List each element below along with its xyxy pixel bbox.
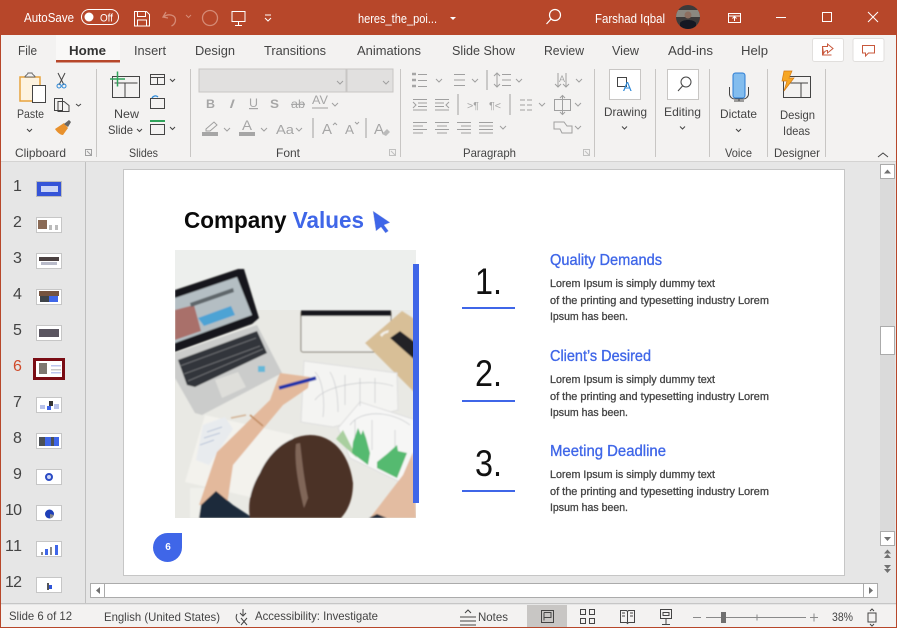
user name: Farshad Iqbal: [595, 11, 665, 26]
design ideas button: [774, 71, 820, 160]
paragraph group: Paragraph: [463, 146, 516, 160]
slide numbers: 2: [13, 214, 22, 231]
item 3: 3.: [475, 443, 502, 484]
font group: AV: [312, 93, 328, 107]
notes button: Notes: [478, 610, 508, 624]
font group: A: [242, 117, 253, 133]
clipboard group: [15, 73, 92, 160]
tablet: [301, 310, 391, 352]
item 3: Ipsum has been.: [550, 502, 628, 514]
item 1: Lorem Ipsum is simply dummy text: [550, 278, 715, 290]
status bar: [0, 603, 897, 627]
zoom slider: 38%: [832, 610, 853, 624]
photo: desk with laptop: [175, 250, 416, 518]
item 2: of the printing and typesetting industry Lorem: [550, 391, 769, 403]
slide numbers: [5, 178, 22, 591]
slide numbers: 10: [5, 502, 22, 519]
ribbon tabs: Insert: [134, 43, 166, 58]
font group: A: [345, 122, 354, 137]
ribbon tabs: Slide Show: [452, 43, 516, 58]
search icon: [546, 10, 560, 24]
font group: [199, 69, 396, 160]
slide numbers: 1: [13, 178, 22, 195]
thumbnail 2: [36, 218, 62, 232]
accessibility status: Accessibility: Investigate: [255, 609, 378, 623]
user avatar: [676, 5, 700, 29]
clipboard group: Clipboard: [15, 146, 66, 160]
item 1: [462, 252, 769, 323]
autosave toggle: Off: [100, 12, 114, 24]
quick access icons: [134, 10, 271, 26]
window controls: [728, 12, 878, 22]
ribbon tabs: Transitions: [264, 43, 326, 58]
notebook: [185, 415, 293, 518]
editing button: Editing: [664, 105, 701, 119]
dictate button: Voice: [725, 146, 752, 160]
slides group: [108, 72, 175, 160]
design ideas button: Ideas: [783, 124, 810, 138]
thumbnail 9: [36, 470, 62, 484]
paragraph group: ¶<: [489, 101, 501, 112]
item 2: [462, 348, 769, 419]
paragraph group: >¶: [467, 101, 479, 112]
status bar: Slide 6 of 12: [9, 609, 72, 623]
zoom slider: [693, 609, 876, 626]
accent bar: [413, 264, 419, 503]
view buttons: [527, 605, 672, 627]
ribbon tabs: Add-ins: [668, 43, 714, 58]
arm and pen: [199, 373, 416, 518]
autosave toggle: AutoSave: [24, 10, 74, 25]
ribbon: [0, 35, 897, 162]
slides group: New: [114, 107, 139, 121]
drawing button: Drawing: [604, 105, 647, 119]
ribbon tabs: Help: [741, 43, 768, 58]
page number badge: [153, 533, 182, 562]
clipboard group: Paste: [17, 107, 44, 121]
slides group: Slides: [129, 146, 158, 160]
page number badge: 6: [165, 542, 171, 553]
horizontal scrollbar: [90, 584, 878, 598]
font group: B: [206, 97, 215, 111]
slide thumbnail panel: [5, 162, 86, 603]
item 3: Meeting Deadline: [550, 443, 666, 460]
dictate button: Dictate: [720, 107, 757, 121]
font group: ab: [291, 97, 305, 111]
thumbnail 10: [36, 506, 62, 520]
laptop: [175, 269, 282, 415]
font group: A: [374, 121, 384, 138]
slides group: Slide: [108, 123, 133, 137]
ribbon tabs: Design: [195, 43, 235, 58]
sketches: [301, 361, 416, 482]
vertical scrollbar: [880, 164, 895, 573]
design ideas button: Design: [780, 108, 815, 122]
item 2: Lorem Ipsum is simply dummy text: [550, 374, 715, 386]
slide numbers: 9: [13, 466, 22, 483]
slide canvas: [124, 170, 844, 576]
item 1: Ipsum has been.: [550, 311, 628, 323]
ribbon tabs: Review: [544, 43, 585, 58]
hair and shirt: [199, 435, 353, 518]
status bar: English (United States): [104, 610, 220, 624]
slide numbers: 5: [13, 322, 22, 339]
thumbnail 5: [36, 326, 62, 340]
font group: U: [249, 96, 258, 110]
thumbnail 8: [36, 434, 62, 448]
font group: A: [322, 121, 332, 138]
slide numbers: 11: [5, 538, 22, 555]
ribbon tabs: View: [612, 43, 640, 58]
item 1: of the printing and typesetting industry Lorem: [550, 295, 769, 307]
font group: Aa: [276, 122, 295, 137]
file name: heres_the_poi...: [358, 11, 437, 26]
collapse ribbon arrow: [878, 153, 888, 157]
thumbnail 1: [36, 182, 62, 196]
item 3: [462, 443, 769, 514]
font group: Font: [276, 146, 301, 160]
thumbnail 6 selected: [34, 360, 64, 378]
ribbon tabs: [18, 35, 768, 62]
thumbnail 3: [36, 254, 62, 268]
slide numbers: 4: [13, 286, 22, 303]
drawing button: [604, 70, 647, 129]
wooden board: [365, 311, 416, 394]
item 3: of the printing and typesetting industry Lorem: [550, 486, 769, 498]
design ideas button: Designer: [774, 146, 820, 160]
item 2: Client’s Desired: [550, 348, 651, 365]
item 1: Quality Demands: [550, 252, 662, 269]
item 1: 1.: [475, 261, 502, 302]
autosave toggle: [24, 10, 118, 25]
editing button: [664, 70, 701, 129]
share and comment buttons: [812, 38, 884, 62]
drawing button: A: [623, 79, 632, 94]
icon: cursor arrow: [373, 211, 390, 233]
dictate button: [720, 73, 757, 160]
item 2: Ipsum has been.: [550, 407, 628, 419]
title bar: [0, 0, 897, 35]
item 3: Lorem Ipsum is simply dummy text: [550, 469, 715, 481]
slide numbers: 12: [5, 574, 22, 591]
thumbnail 11: [36, 542, 62, 556]
paragraph group: [412, 70, 590, 160]
font group: S: [270, 97, 279, 111]
slide title: Company Values: [184, 207, 364, 233]
thumbnail 7: [36, 398, 62, 412]
thumbnail 12: [36, 578, 62, 592]
ribbon tabs: Animations: [357, 43, 421, 58]
ribbon separators: [96, 69, 826, 157]
slide numbers: 3: [13, 250, 22, 267]
ribbon tabs: File: [18, 43, 37, 58]
notes button: [460, 610, 508, 625]
thumbnail 4: [36, 290, 62, 304]
item 2: 2.: [475, 353, 502, 394]
paragraph group: A: [559, 74, 565, 84]
font group: I: [229, 97, 236, 111]
slide numbers: 6: [13, 358, 22, 375]
slide numbers: 7: [13, 394, 22, 411]
ribbon tabs: Home: [69, 43, 106, 58]
slide numbers: 8: [13, 430, 22, 447]
